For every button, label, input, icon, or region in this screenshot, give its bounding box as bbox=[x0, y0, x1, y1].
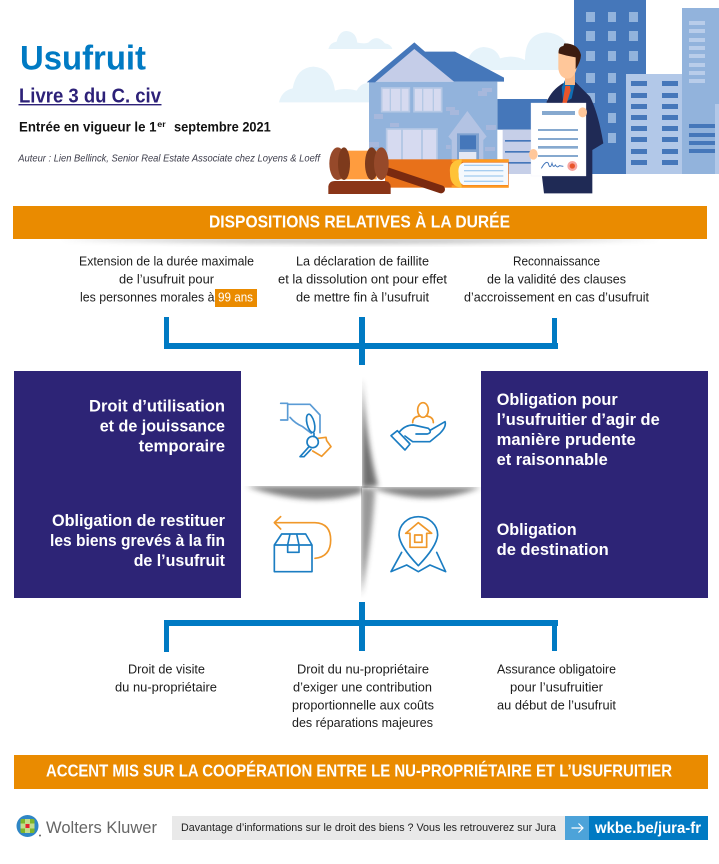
book bbox=[385, 159, 509, 188]
panel text: obligation to return: les biens grevés à la fin bbox=[50, 532, 225, 550]
text: accretion clauses bbox=[464, 254, 650, 304]
panel text: obligation to return: de l’usufruit bbox=[134, 552, 226, 570]
garage bbox=[497, 99, 547, 174]
arrow button bbox=[565, 816, 589, 840]
logo: Wolters Kluwer bbox=[16, 815, 157, 837]
gavel bbox=[328, 147, 441, 194]
logo: Wolters Kluwer: Wolters Kluwer bbox=[46, 818, 157, 837]
panel text: prudent conduct: manière prudente bbox=[497, 431, 636, 449]
author: Auteur : Lien Bellinck, Senior Real Estate Associate chez Loyens & Loeff bbox=[17, 154, 321, 165]
icon: box with return arrow bbox=[274, 517, 331, 572]
text: contribution to repairs: des réparations majeures bbox=[292, 716, 433, 730]
panel: right purple bbox=[481, 371, 708, 598]
text: bankruptcy and dissolution: de mettre fin à l’usufruit bbox=[296, 290, 430, 304]
text: maximum duration extension: de l’usufruit pour bbox=[119, 272, 214, 286]
text: accretion clauses: d’accroissement en cas d’usufruit bbox=[464, 290, 650, 304]
tall dark building bbox=[574, 0, 646, 174]
footer link bbox=[589, 816, 708, 840]
text: contribution to repairs: proportionnelle aux coûts bbox=[292, 698, 434, 712]
text: contribution to repairs: d’exiger une contribution bbox=[293, 681, 432, 695]
text: bankruptcy and dissolution: La déclaration de faillite bbox=[296, 254, 429, 268]
text: right of visit bbox=[115, 663, 217, 695]
text: bankruptcy and dissolution: et la dissolution ont pour effet bbox=[278, 272, 448, 286]
top connector bracket bbox=[164, 317, 558, 365]
icon: map pin with house bbox=[391, 517, 446, 572]
panel text: right of use: temporaire bbox=[139, 438, 225, 456]
bottom connector bracket bbox=[164, 602, 558, 652]
text: compulsory insurance: pour l’usufruitier bbox=[510, 681, 603, 695]
heading bar: duration bbox=[13, 206, 707, 243]
subtitle: Livre 3 du C. civ bbox=[19, 86, 162, 108]
panel text: prudent conduct: Obligation pour bbox=[497, 391, 618, 409]
panel: left purple bbox=[14, 371, 241, 598]
effective date: septembre 2021 bbox=[174, 119, 271, 135]
house bbox=[367, 42, 504, 162]
panel text: right of use bbox=[89, 398, 225, 456]
heading bar: cooperation bbox=[14, 755, 708, 789]
heading bar: duration: DISPOSITIONS RELATIVES À LA DURÉE bbox=[209, 211, 510, 232]
hero illustration bbox=[279, 0, 719, 194]
shadows between icon cards bbox=[246, 378, 481, 596]
effective date: er bbox=[157, 119, 166, 129]
text: contribution to repairs: Droit du nu-propriétaire bbox=[297, 663, 429, 677]
panel text: right of use: Droit d’utilisation bbox=[89, 398, 225, 416]
text: maximum duration extension bbox=[79, 254, 257, 307]
clouds bbox=[279, 31, 570, 102]
text: right of visit: Droit de visite bbox=[128, 663, 205, 677]
text: bankruptcy and dissolution bbox=[278, 254, 448, 304]
panel text: obligation of destination: Obligation bbox=[497, 521, 577, 539]
panel text: obligation to return bbox=[50, 512, 226, 570]
text: maximum duration extension: les personnes morales à bbox=[80, 290, 215, 304]
text: right of visit: du nu-propriétaire bbox=[115, 681, 217, 695]
text: contribution to repairs bbox=[292, 663, 434, 730]
text: maximum duration extension: 99 ans bbox=[218, 290, 253, 304]
text: compulsory insurance: au début de l’usufruit bbox=[497, 698, 617, 712]
panel text: right of use: et de jouissance bbox=[100, 418, 225, 436]
text: compulsory insurance bbox=[497, 663, 617, 712]
panel text: obligation of destination: de destination bbox=[497, 541, 609, 559]
panel text: obligation to return: Obligation de restituer bbox=[52, 512, 226, 530]
text: compulsory insurance: Assurance obligatoire bbox=[497, 663, 616, 677]
text: maximum duration extension: Extension de la durée maximale bbox=[79, 254, 254, 268]
footer message: Davantage d’informations sur le droit des biens ? Vous les retrouverez sur Jura bbox=[181, 822, 557, 834]
right building bbox=[682, 8, 719, 174]
icon: hand with house key bbox=[281, 403, 331, 457]
businessman with document bbox=[529, 43, 603, 193]
text: accretion clauses: Reconnaissance bbox=[513, 254, 600, 268]
panel text: prudent conduct: et raisonnable bbox=[497, 451, 608, 469]
icon: hand holding person bbox=[391, 403, 445, 450]
footer link: wkbe.be/jura-fr bbox=[594, 820, 701, 837]
footer message bbox=[172, 816, 565, 840]
effective date: Entrée en vigueur le 1 bbox=[19, 119, 157, 135]
middle building bbox=[626, 74, 682, 174]
text: accretion clauses: de la validité des clauses bbox=[487, 272, 626, 286]
panel text: obligation of destination bbox=[497, 521, 609, 559]
title: Usufruit bbox=[20, 39, 146, 77]
panel text: prudent conduct: l’usufruitier d’agir de bbox=[497, 411, 660, 429]
panel text: prudent conduct bbox=[497, 391, 660, 469]
effective date bbox=[19, 119, 271, 135]
